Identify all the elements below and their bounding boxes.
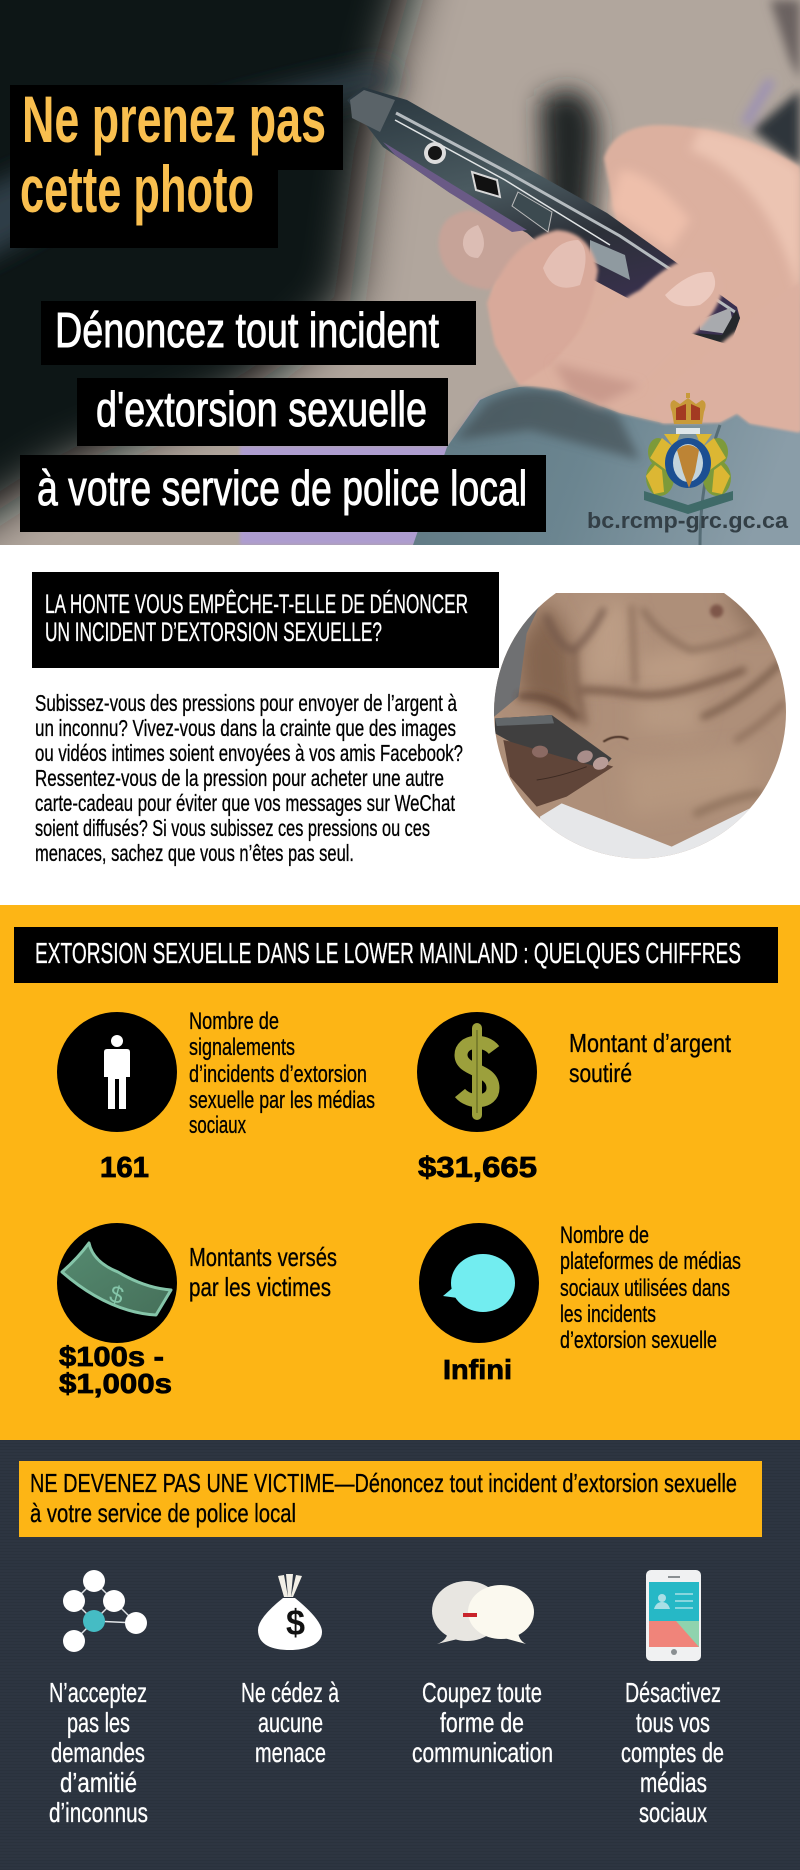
advice: deactivate accounts: Désactivez (625, 1677, 721, 1708)
heading: shame question: UN INCIDENT D’EXTORSION SEXUELLE? (45, 617, 382, 647)
hand (439, 125, 800, 432)
phone (347, 87, 740, 345)
stat: platforms: les incidents (560, 1301, 656, 1328)
stat: money extorted: soutiré (569, 1058, 632, 1088)
icon: speech bubble (443, 1254, 515, 1312)
stat: money extorted: $31,665 (418, 1152, 537, 1184)
text block: intro paragraph (35, 690, 463, 866)
heading: shame question (32, 572, 499, 668)
stat: reports: Nombre de (189, 1008, 279, 1035)
icon: money bag (258, 1574, 322, 1650)
jacket sleeve (413, 386, 800, 545)
icon: dollar sign (460, 1028, 494, 1115)
text block: intro paragraph: carte-cadeau pour éviter que vos messages sur WeChat (35, 790, 455, 816)
website address: bc.rcmp-grc.gc.ca (587, 508, 789, 533)
advice: do not give in: Ne cédez à (241, 1677, 339, 1708)
stat: platforms (419, 1222, 741, 1385)
stat: reports: 161 (100, 1152, 149, 1184)
advice: refuse strangers: N’acceptez (49, 1677, 147, 1708)
advice: deactivate accounts: médias (640, 1767, 707, 1798)
heading: shame question: LA HONTE VOUS EMPÊCHE-T-ELLE DE DÉNONCER (45, 588, 468, 619)
heading: statistics bar (14, 927, 778, 983)
stat: amounts paid: $100s - (59, 1341, 164, 1372)
panel: prevention advice (0, 1440, 800, 1870)
RCMP crest (644, 393, 733, 514)
advice: deactivate accounts: comptes de (621, 1737, 724, 1768)
stat: reports: sexuelle par les médias (189, 1087, 375, 1114)
advice: refuse strangers (49, 1570, 148, 1828)
subtitle: report to police: à votre service de police local (37, 462, 527, 516)
text block: intro paragraph: soient diffusés? Si vous subissez ces pressions ou ces (35, 815, 430, 841)
subtitle: report to police (20, 301, 546, 532)
stat: platforms: d’extorsion sexuelle (560, 1327, 717, 1354)
text block: intro paragraph: Subissez-vous des pressions pour envoyer de l’argent à (35, 690, 457, 716)
icon: smartphone (646, 1570, 701, 1661)
fingers (487, 230, 800, 432)
stat: amounts paid (57, 1223, 337, 1399)
text block: intro paragraph: un inconnu? Vivez-vous dans la crainte que des images (35, 715, 456, 741)
text block: intro paragraph: ou vidéos intimes soient envoyées à vos amis Facebook? (35, 740, 463, 766)
advice: do not give in: menace (255, 1737, 326, 1768)
panel: hero photo banner (0, 0, 800, 560)
advice: refuse strangers: d’inconnus (49, 1797, 148, 1828)
advice: cut communication: Coupez toute (422, 1677, 542, 1708)
advice: refuse strangers: d’amitié (60, 1767, 137, 1798)
icon: person (104, 1035, 130, 1109)
advice: deactivate accounts: tous vos (636, 1707, 710, 1738)
advice: cut communication: forme de (440, 1707, 524, 1738)
advice: refuse strangers: demandes (51, 1737, 145, 1768)
stat: platforms: Infini (443, 1354, 512, 1385)
panel: shame intro (32, 572, 786, 866)
advice: cut communication: communication (412, 1737, 553, 1768)
icon: banknote: $ (107, 1281, 127, 1310)
stat: reports (57, 1008, 375, 1184)
text block: intro paragraph: Ressentez-vous de la pression pour acheter une autre (35, 765, 444, 791)
advice: cut communication (412, 1581, 553, 1768)
icon: speech bubbles (432, 1581, 534, 1644)
photo: torso with phone (490, 590, 790, 865)
heading: do not become a victim: à votre service de police local (30, 1498, 296, 1528)
stat: reports: sociaux (189, 1112, 246, 1139)
stat: platforms: sociaux utilisées dans (560, 1275, 730, 1302)
heading: do not become a victim (19, 1461, 762, 1537)
subtitle: report to police: d'extorsion sexuelle (96, 383, 427, 437)
advice: deactivate accounts (621, 1570, 724, 1828)
icon: banknote (62, 1243, 171, 1315)
stat: amounts paid: $1,000s (59, 1368, 172, 1399)
text block: intro paragraph: menaces, sachez que vous n’êtes pas seul. (35, 840, 354, 866)
stat: platforms: Nombre de (560, 1222, 649, 1249)
stat: amounts paid: par les victimes (189, 1272, 331, 1302)
title: Ne prenez pas cette photo (10, 82, 343, 248)
advice: refuse strangers: pas les (67, 1707, 130, 1738)
stat: platforms: plateformes de médias (560, 1248, 741, 1275)
panel: statistics (0, 905, 800, 1440)
advice: do not give in: aucune (258, 1707, 323, 1738)
icon: money bag: $ (286, 1602, 305, 1643)
icon: network (63, 1570, 147, 1652)
advice: deactivate accounts: sociaux (639, 1797, 707, 1828)
stat: amounts paid: Montants versés (189, 1242, 337, 1272)
photo: hand holding a phone (0, 0, 800, 560)
stat: money extorted (417, 1012, 732, 1184)
title: Ne prenez pas cette photo: Ne prenez pas (22, 82, 326, 156)
stat: money extorted: Montant d’argent (569, 1028, 732, 1058)
advice: do not give in (241, 1574, 339, 1768)
subtitle: report to police: Dénoncez tout incident (55, 304, 439, 358)
stat: reports: d’incidents d’extorsion (189, 1061, 367, 1088)
stat: reports: signalements (189, 1034, 295, 1061)
title: Ne prenez pas cette photo: cette photo (20, 152, 254, 226)
